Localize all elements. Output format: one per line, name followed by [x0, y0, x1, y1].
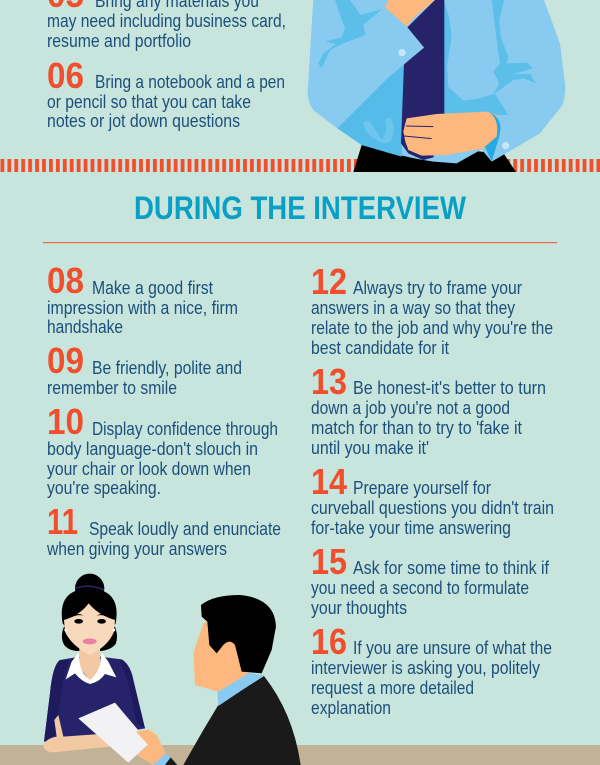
shirt shadow: lower left [337, 60, 404, 157]
tips 05-06: resume and portfolio [47, 31, 191, 51]
tip 10 [47, 401, 278, 498]
shirt fold: right [492, 0, 536, 94]
woman hair bun [75, 574, 104, 603]
upper sleeve [308, 0, 424, 128]
man hand [136, 729, 166, 765]
shirt fold: lower left [363, 117, 394, 143]
tip 13: until you make it' [311, 438, 429, 458]
woman neck [79, 648, 101, 682]
tip 14: Prepare yourself for [353, 478, 491, 498]
tip 15 [311, 541, 550, 618]
shirt fold: upper sleeve [318, 0, 382, 68]
finger lines [404, 126, 433, 139]
section heading: DURING THE INTERVIEW [134, 190, 467, 226]
tip 08 [47, 260, 238, 337]
lower hand [403, 112, 499, 156]
tip 11: Speak loudly and enunciate [89, 519, 281, 539]
upper hand [385, 0, 435, 27]
woman face [64, 603, 115, 655]
hair band [75, 586, 104, 590]
man hair [201, 595, 276, 673]
tip 10: body language-don't slouch in [47, 439, 258, 459]
tip 10: you're speaking. [47, 478, 161, 498]
woman eyes and brows [71, 614, 109, 624]
heading rule [43, 242, 557, 243]
tip 16: explanation [311, 698, 391, 718]
woman lips [83, 638, 97, 644]
woman collar [66, 653, 116, 684]
tip 09: 09 [47, 340, 84, 381]
tip 10: your chair or look down when [47, 459, 251, 479]
man cuff [153, 753, 177, 765]
tip 14: 14 [311, 461, 347, 502]
tip 15: your thoughts [311, 598, 407, 618]
tip 12 [311, 261, 553, 358]
tip 12: Always try to frame your [353, 278, 522, 298]
tips 05-06: Bring a notebook and a pen [95, 72, 285, 92]
shirt [308, 0, 565, 163]
woman earrings [64, 629, 67, 631]
tip 10: 10 [47, 401, 84, 442]
tip 10: Display confidence through [92, 419, 278, 439]
tip 15: you need a second to formulate [311, 578, 529, 598]
tip 09: remember to smile [47, 378, 177, 398]
necktie [401, 0, 444, 160]
tip 11 [46, 501, 281, 559]
tip 13: Be honest-it's better to turn [353, 378, 546, 398]
tip 14: curveball questions you didn't train [311, 498, 554, 518]
tip 14: for-take your time answering [311, 518, 511, 538]
tip 16: 16 [311, 621, 347, 662]
tip 16 [311, 621, 552, 718]
striped divider [0, 159, 600, 172]
tip 13 [311, 361, 546, 458]
cuff [485, 113, 501, 162]
tip 14 [311, 461, 554, 538]
woman sweater [44, 657, 145, 742]
tips 05-06: 06 [47, 55, 84, 96]
shirt shadow: placket band [444, 0, 508, 115]
tip 12: answers in a way so that they [311, 298, 515, 318]
tip 16: request a more detailed [311, 678, 474, 698]
tip 08: 08 [47, 260, 84, 301]
tip 09 [47, 340, 242, 398]
man face [193, 613, 248, 692]
illustration: interview scene [43, 574, 301, 765]
woman back hair [62, 627, 117, 651]
tips 05-06: or pencil so that you can take [47, 92, 251, 112]
tip 16: If you are unsure of what the [353, 638, 552, 658]
tip 12: 12 [311, 261, 347, 302]
table [0, 745, 600, 765]
tip 09: Be friendly, polite and [92, 358, 242, 378]
tips 05-06: may need including business card, [47, 11, 286, 31]
tip 08: impression with a nice, firm [47, 298, 238, 318]
tip 15: Ask for some time to think if [353, 558, 550, 578]
tip 13: 13 [311, 361, 347, 402]
tip 16: interviewer is asking you, politely [311, 658, 540, 678]
woman sleeves [44, 659, 145, 742]
tips 05-06: notes or jot down questions [47, 111, 240, 131]
tip 11: 11 [47, 501, 78, 542]
paper [78, 703, 149, 763]
tip 13: down a job you're not a good [311, 398, 510, 418]
tip 12: best candidate for it [311, 338, 449, 358]
man suit [183, 676, 301, 765]
tip 08: handshake [47, 317, 123, 337]
tip 11: when giving your answers [46, 539, 227, 559]
woman front hair [62, 588, 117, 628]
tip 12: relate to the job and why you're the [311, 318, 553, 338]
man sleeve [165, 757, 177, 765]
shirt buttons [398, 49, 406, 56]
tip 08: Make a good first [92, 278, 213, 298]
tip 15: 15 [311, 541, 347, 582]
woman hand and arm [43, 715, 110, 752]
trousers [353, 145, 516, 172]
tips 05-06 [47, 0, 286, 131]
tip 13: match for than to try to 'fake it [311, 418, 522, 438]
illustration: man adjusting tie [308, 0, 565, 172]
man collar [217, 673, 264, 706]
